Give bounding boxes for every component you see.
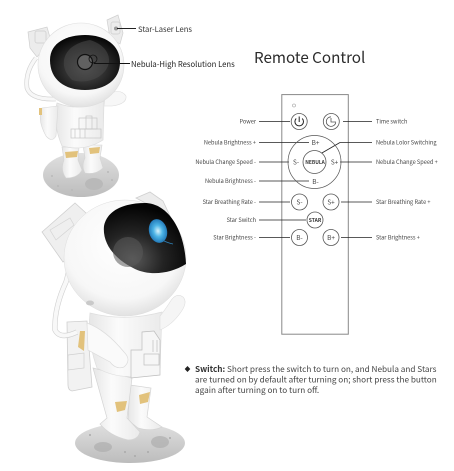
nebula ring [288, 136, 341, 188]
switch instructions: again after turning on to turn off. [195, 384, 319, 396]
left button labels: Nebula Change Speed - [195, 158, 256, 166]
star brightness plus button [323, 230, 339, 246]
nebula button: NEBULA [305, 159, 326, 166]
right button labels: Star Breathing Rate + [376, 198, 431, 206]
bullet [185, 366, 190, 372]
right hand [104, 92, 126, 106]
body [89, 312, 162, 376]
ring labels [291, 138, 339, 186]
visor [104, 203, 186, 273]
switch instructions: Switch: Short press the switch to turn on, and Nebula and Stars [195, 363, 436, 375]
ring labels: B- [312, 177, 319, 186]
nebula light [146, 217, 173, 245]
visor reflection [113, 237, 143, 267]
helmet [38, 23, 124, 107]
star breathing minus button: S- [296, 198, 303, 206]
ring labels: B+ [312, 138, 320, 147]
left button labels: Nebula Brightness - [205, 177, 256, 185]
star switch button: STAR [309, 217, 322, 224]
remote control [259, 95, 372, 334]
ear panel right [107, 15, 123, 44]
craters [51, 171, 113, 191]
left arm [40, 106, 58, 140]
star brightness minus button [292, 230, 308, 246]
tube [55, 245, 77, 336]
chest panel [131, 331, 160, 378]
ear panel left [42, 203, 97, 262]
visor [50, 35, 120, 90]
timer button [323, 114, 339, 130]
raised hand [160, 295, 185, 330]
side button [86, 300, 94, 306]
arm [87, 323, 128, 368]
star breathing plus button: S+ [327, 198, 335, 206]
indicator light [292, 104, 296, 107]
nebula button [303, 150, 326, 174]
legs [93, 368, 162, 440]
left button labels: Nebula Brightness + [204, 138, 256, 146]
star switch button [307, 212, 323, 228]
astronaut: upper product view [27, 15, 126, 197]
callout: Star-Laser Lens: Star-Laser Lens [138, 24, 192, 35]
callout: Nebula-High Resolution Lens: Nebula-High Resolution Lens [131, 59, 235, 70]
star brightness minus button: B- [296, 233, 303, 242]
body [55, 101, 104, 148]
ring labels: S+ [331, 158, 339, 166]
title: Remote Control [254, 46, 365, 68]
ear panel left [28, 27, 51, 57]
callout lines [259, 122, 372, 238]
backpack [67, 321, 92, 391]
remote body [282, 95, 348, 334]
star breathing minus button [292, 194, 308, 210]
star breathing plus button [323, 194, 339, 210]
astronaut: lower product view with nebula [42, 192, 186, 463]
star brightness plus button: B+ [327, 233, 335, 242]
left button labels: Star Breathing Rate - [203, 198, 256, 206]
switch instructions: are turned on by default after turning on; short press the button [195, 374, 437, 386]
left button labels [195, 118, 257, 242]
right button labels: Star Brightness + [376, 234, 420, 242]
base: moon rock [43, 153, 119, 197]
ear panel right [136, 192, 170, 216]
legs [62, 145, 103, 178]
power button [291, 114, 307, 130]
chest panel [71, 116, 101, 138]
gold strap [78, 331, 85, 351]
helmet [64, 200, 186, 316]
ring labels: S- [293, 158, 299, 166]
switch instructions [185, 363, 439, 396]
left button labels: Power [240, 118, 257, 126]
right button labels: Nebula Lolor Switching [376, 138, 437, 146]
base: moon rock [75, 423, 185, 463]
right button labels: Time switch [376, 118, 407, 126]
right button labels [376, 118, 438, 242]
gold strap [39, 108, 42, 115]
lens dot [114, 26, 118, 30]
tube [27, 58, 56, 99]
lens [78, 54, 97, 70]
left button labels: Star Switch [227, 216, 256, 224]
craters [89, 434, 171, 457]
backpack pocket [68, 353, 84, 370]
right button labels: Nebula Change Speed + [376, 158, 438, 166]
left button labels: Star Brightness - [213, 234, 256, 242]
visor highlight [64, 40, 109, 81]
